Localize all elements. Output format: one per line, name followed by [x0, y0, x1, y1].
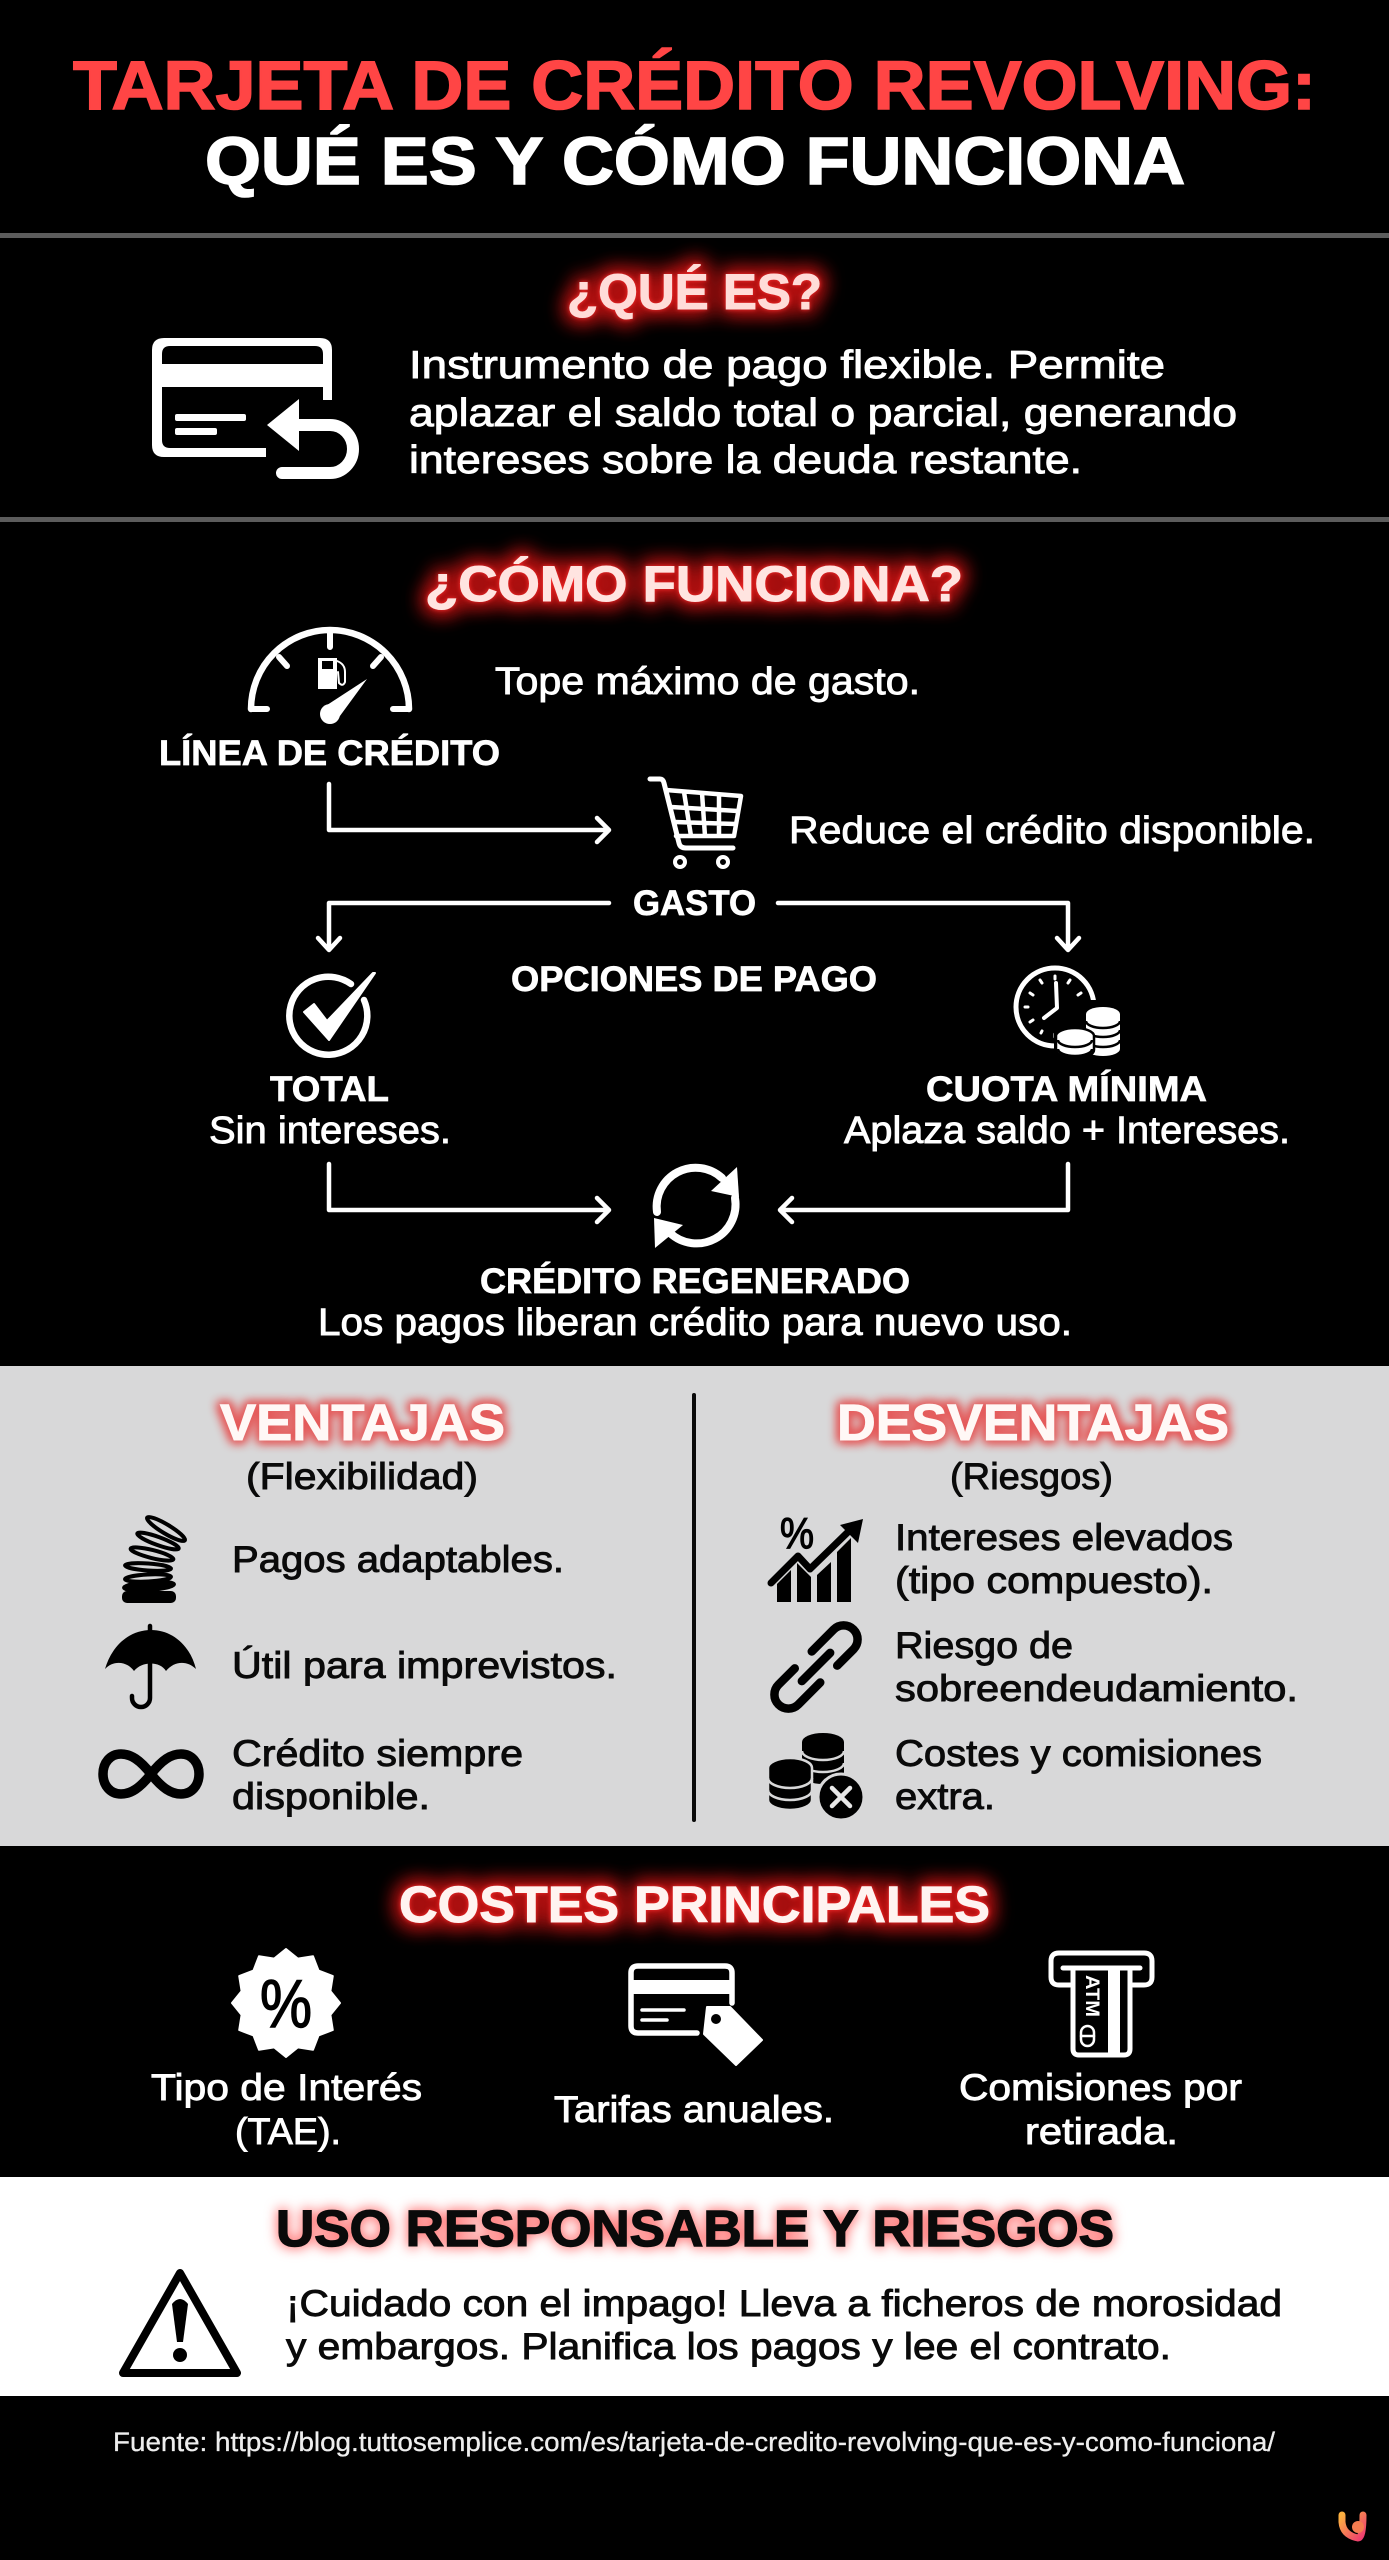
- text: reduce el crédito: Reduce el crédito disponible.: [789, 810, 1315, 852]
- text: warning: ¡Cuidado con el impago! Lleva a ficheros de morosidad: [286, 2283, 1282, 2324]
- heading: ventajas: [220, 1394, 505, 1497]
- text: crédito siempre disponible: Crédito siempre: [232, 1733, 523, 1774]
- icon: credit card with return arrow: [152, 338, 353, 473]
- heading: desventajas: [837, 1394, 1229, 1497]
- text: tarifas anuales: Tarifas anuales.: [554, 2089, 834, 2130]
- text: intereses elevados: (tipo compuesto).: [895, 1560, 1213, 1601]
- icon: refresh cycle: [654, 1167, 739, 1248]
- arrow: gasto to cuota mínima: [778, 903, 1079, 950]
- title: QUÉ ES Y CÓMO FUNCIONA: [205, 124, 1185, 199]
- text: definition: aplazar el saldo total o parcial, generando: [409, 392, 1237, 435]
- text: comisiones por retirada: Comisiones por: [959, 2067, 1242, 2108]
- text: intereses elevados: [895, 1517, 1233, 1601]
- text: comisiones por retirada: retirada.: [1025, 2111, 1178, 2152]
- text: costes y comisiones: Costes y comisiones: [895, 1733, 1262, 1774]
- block: crédito regenerado: [318, 1261, 1072, 1344]
- text: definition: intereses sobre la deuda restante.: [409, 439, 1082, 482]
- label: gasto: GASTO: [633, 884, 756, 923]
- text: costes y comisiones: [895, 1733, 1262, 1817]
- icon: check in circle: [289, 973, 375, 1055]
- heading: qué es: ¿QUÉ ES?: [567, 264, 822, 320]
- icon: infinity: [103, 1754, 199, 1794]
- block: cuota mínima: CUOTA MÍNIMA: [926, 1069, 1207, 1109]
- icon: coins with x: [768, 1733, 864, 1820]
- text: pagos adaptables: Pagos adaptables.: [232, 1539, 564, 1580]
- heading: ventajas: VENTAJAS: [220, 1394, 505, 1451]
- block: total: [209, 1070, 451, 1152]
- block: cuota mínima: [844, 1069, 1290, 1152]
- text: crédito siempre disponible: disponible.: [232, 1776, 430, 1817]
- text: crédito siempre disponible: [232, 1733, 523, 1817]
- arrow: total to crédito regenerado: [329, 1164, 609, 1222]
- block: cuota mínima: Aplaza saldo + Intereses.: [844, 1110, 1290, 1152]
- text: riesgo de sobreendeudamiento: Riesgo de: [895, 1625, 1073, 1666]
- title: TARJETA DE CRÉDITO REVOLVING:: [73, 47, 1316, 124]
- text: útil para imprevistos: Útil para imprevistos.: [232, 1645, 617, 1686]
- text: riesgo de sobreendeudamiento: sobreendeudamiento.: [895, 1668, 1298, 1709]
- icon: clock with coins: [1016, 968, 1124, 1058]
- label: opciones de pago: OPCIONES DE PAGO: [511, 960, 877, 999]
- icon: brand logo: [1342, 2515, 1364, 2538]
- text: tipo de interés: Tipo de Interés: [151, 2067, 422, 2108]
- panel: qué es: [152, 264, 1237, 482]
- icon: rising chart with percent: %: [780, 1509, 814, 1558]
- icon: fuel gauge: [251, 630, 409, 724]
- text: comisiones por retirada: [959, 2067, 1242, 2152]
- block: total: TOTAL: [270, 1070, 389, 1109]
- heading: desventajas: DESVENTAJAS: [837, 1394, 1229, 1451]
- text: warning: [286, 2283, 1282, 2367]
- icon: rising chart with percent: [771, 1509, 863, 1602]
- heading: desventajas: (Riesgos): [950, 1456, 1113, 1497]
- source: Fuente: https://blog.tuttosemplice.com/es/tarjeta-de-credito-revolving-que-es-y-como-funciona/: [113, 2427, 1276, 2457]
- icon: card with price tag: [631, 1966, 762, 2065]
- text: riesgo de sobreendeudamiento: [895, 1625, 1298, 1709]
- text: tipo de interés: (TAE).: [235, 2111, 341, 2152]
- text: tipo de interés: [151, 2067, 422, 2152]
- heading: ventajas: (Flexibilidad): [246, 1456, 478, 1497]
- icon: chain link: [769, 1620, 863, 1714]
- icon: shopping cart: [650, 779, 741, 867]
- icon: percent seal: %: [260, 1966, 312, 2042]
- text: intereses elevados: Intereses elevados: [895, 1517, 1233, 1558]
- heading: uso responsable: USO RESPONSABLE Y RIESGOS: [276, 2200, 1114, 2257]
- icon: warning triangle: [123, 2273, 237, 2373]
- text: tope máximo: Tope máximo de gasto.: [495, 661, 920, 703]
- text: costes y comisiones: extra.: [895, 1776, 995, 1817]
- title: [73, 47, 1316, 199]
- icon: percent seal: [232, 1949, 340, 2057]
- label: línea de crédito: LÍNEA DE CRÉDITO: [159, 733, 500, 773]
- arrow: línea to gasto: [329, 784, 609, 842]
- block: total: Sin intereses.: [209, 1110, 451, 1152]
- icon: atm slot with card: ATM: [1081, 1975, 1102, 2017]
- text: definition: Instrumento de pago flexible. Permite: [409, 344, 1165, 387]
- text: definition: [409, 344, 1237, 482]
- panel: cómo funciona: [159, 556, 1315, 1344]
- heading: cómo funciona: ¿CÓMO FUNCIONA?: [425, 556, 963, 612]
- text: warning: y embargos. Planifica los pagos y lee el contrato.: [286, 2326, 1171, 2367]
- panel: costes principales: [151, 1876, 1242, 2152]
- icon: atm slot with card: [1051, 1953, 1152, 2055]
- arrow: cuota mínima to crédito regenerado: [780, 1164, 1068, 1222]
- block: crédito regenerado: Los pagos liberan crédito para nuevo uso.: [318, 1302, 1072, 1344]
- panel: uso responsable: [0, 2177, 1389, 2396]
- arrow: gasto to total: [318, 903, 609, 950]
- block: crédito regenerado: CRÉDITO REGENERADO: [480, 1261, 910, 1301]
- icon: umbrella: [105, 1626, 196, 1707]
- panel: ventajas y desventajas: [0, 1366, 1389, 1846]
- heading: costes principales: COSTES PRINCIPALES: [399, 1876, 990, 1933]
- icon: spring: [122, 1514, 187, 1603]
